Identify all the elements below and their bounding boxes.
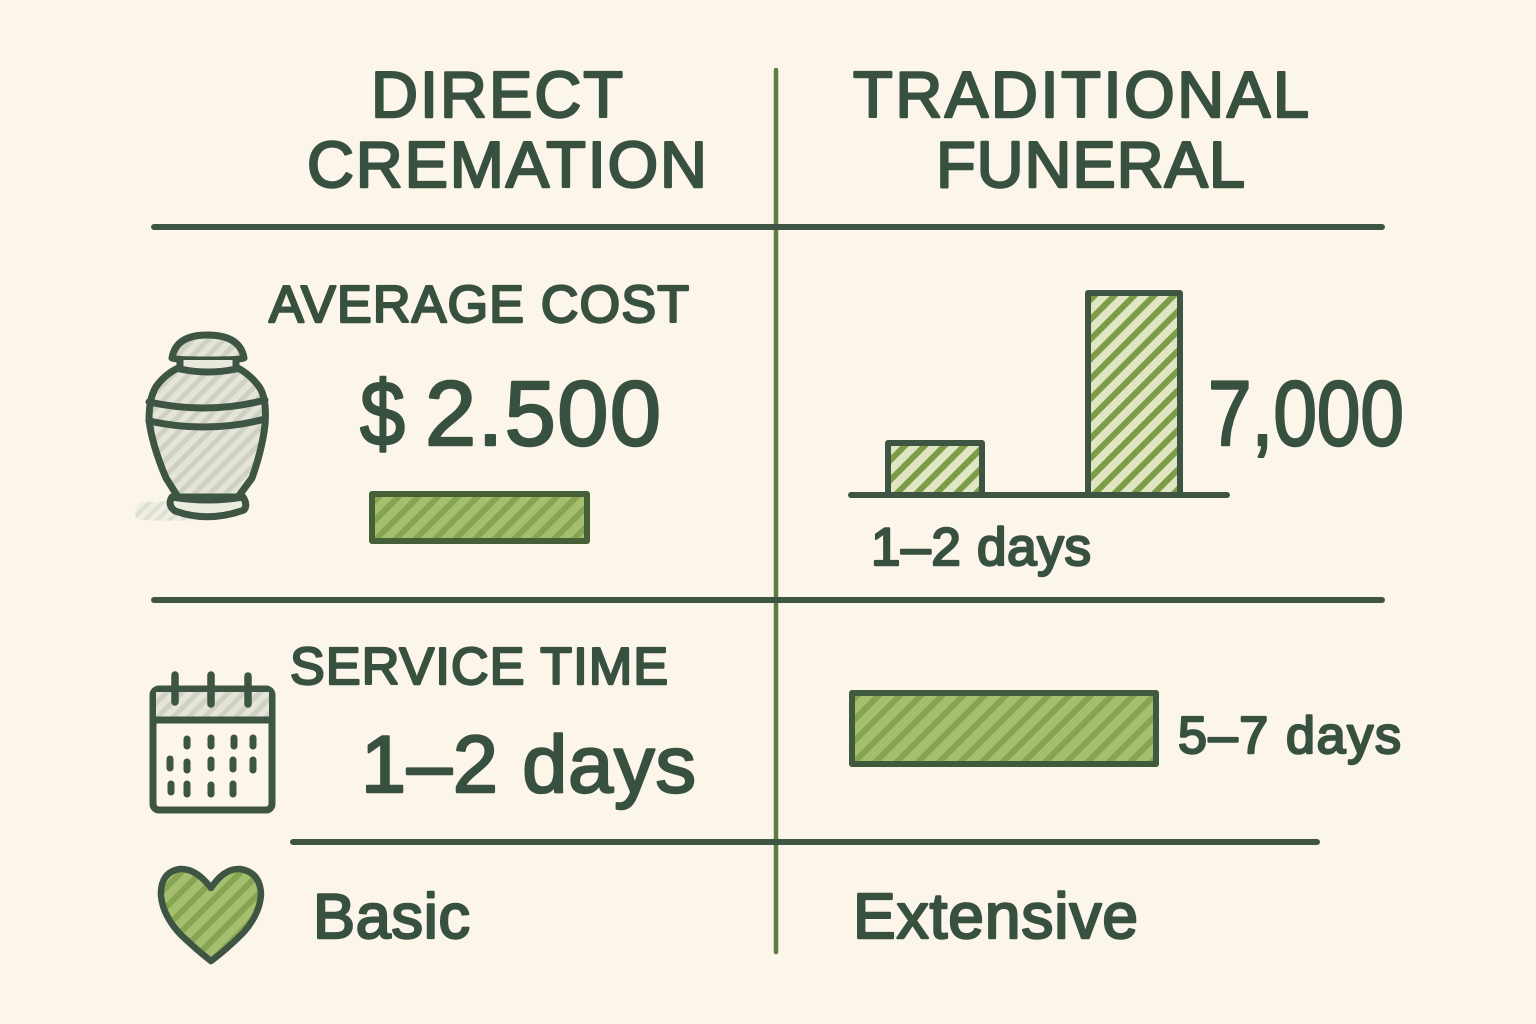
calendar dots — [170, 738, 253, 794]
heading: direct cremation — [307, 58, 707, 201]
icon: heart — [161, 869, 261, 961]
calendar header — [156, 692, 269, 720]
table rules — [154, 227, 1382, 842]
urn shadow — [135, 501, 200, 521]
heading: direct cremation: CREMATION — [307, 128, 707, 201]
icon: urn — [135, 335, 265, 521]
urn bands — [149, 400, 265, 427]
value: direct cost: 2.500 — [425, 363, 661, 465]
urn lid — [172, 335, 244, 360]
label: extensive: Extensive — [853, 880, 1138, 952]
icon: calendar — [153, 675, 272, 810]
bar chart: traditional cost — [851, 293, 1227, 495]
value: direct cost: $ — [360, 363, 405, 465]
tall bar — [1088, 293, 1180, 495]
value: traditional service time: 5–7 days — [1178, 707, 1401, 765]
heading: direct cremation: DIRECT — [371, 58, 623, 131]
bar: direct cost — [372, 494, 587, 541]
urn body — [149, 368, 265, 497]
urn neck — [180, 360, 236, 372]
label: average cost: AVERAGE COST — [269, 276, 689, 334]
calendar rings — [175, 675, 248, 704]
urn base — [170, 497, 246, 517]
bar: traditional service time — [852, 693, 1156, 764]
value: traditional cost: 7,000 — [1208, 363, 1404, 465]
center divider — [774, 70, 778, 952]
label: basic: Basic — [313, 882, 470, 952]
axis — [851, 492, 1227, 498]
heading: traditional funeral: FUNERAL — [936, 128, 1245, 201]
label: service time: SERVICE TIME — [290, 638, 668, 696]
heading: traditional funeral: TRADITIONAL — [853, 58, 1309, 131]
label: chart days: 1–2 days — [871, 518, 1091, 577]
value: direct service time: 1–2 days — [361, 720, 696, 810]
heading: traditional funeral — [853, 58, 1309, 201]
small bar — [888, 443, 982, 495]
